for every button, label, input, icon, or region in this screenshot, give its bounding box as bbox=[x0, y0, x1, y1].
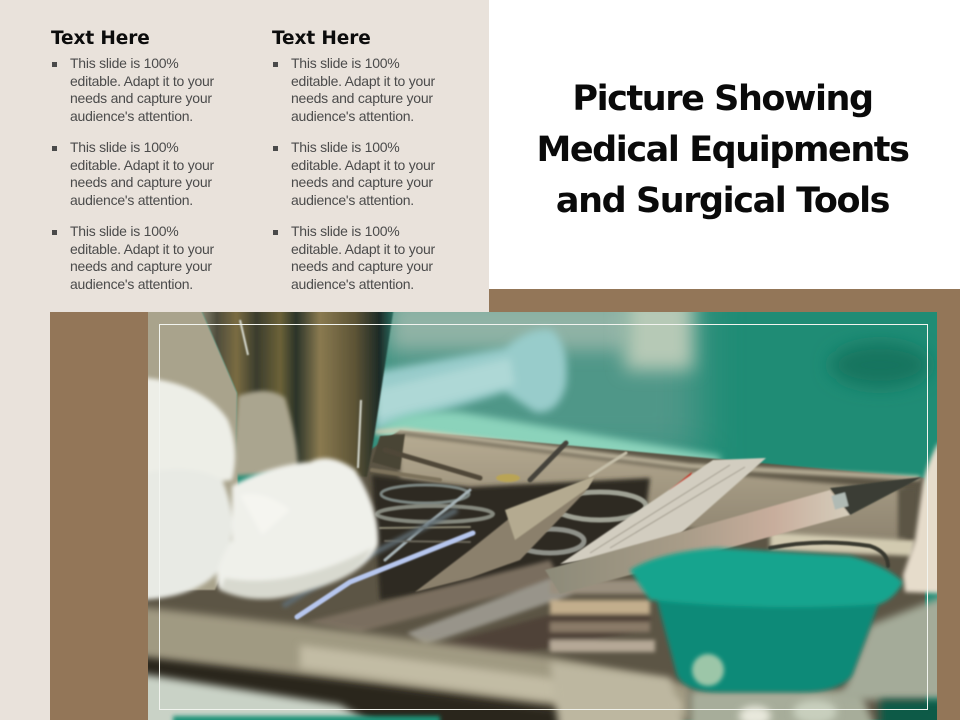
bullet: right 1: editable. Adapt it to your bbox=[291, 73, 435, 89]
green rubber bowl bbox=[630, 548, 903, 692]
photo background: blurred green drapes bbox=[100, 280, 960, 720]
bullet: right 2: This slide is 100% bbox=[291, 139, 400, 155]
bullet: left 3: needs and capture your bbox=[70, 258, 212, 274]
panel: beige text background bbox=[0, 0, 489, 720]
syringe (blurred) bbox=[375, 329, 567, 432]
bullet: right 3: editable. Adapt it to your bbox=[291, 241, 435, 257]
long steel handle and needle tip bbox=[545, 477, 922, 594]
metal cup bbox=[197, 300, 395, 477]
bullet: right 1: needs and capture your bbox=[291, 90, 433, 106]
bullet: right 3 bbox=[273, 223, 435, 292]
bullet: right 1: This slide is 100% bbox=[291, 55, 400, 71]
bullet: right 3: audience's attention. bbox=[291, 276, 414, 292]
text column: left bbox=[51, 28, 214, 292]
heading: right column: Text Here bbox=[272, 28, 371, 49]
bullet: left 3: This slide is 100% bbox=[70, 223, 179, 239]
scalpel blade bbox=[415, 476, 595, 592]
bullet: left 2: editable. Adapt it to your bbox=[70, 157, 214, 173]
panel: brown backing block bbox=[50, 289, 960, 720]
bullet: left 2 bbox=[52, 139, 214, 208]
gauze behind cotton bbox=[130, 300, 240, 590]
bullet: left 1: editable. Adapt it to your bbox=[70, 73, 214, 89]
bullet: left 3: editable. Adapt it to your bbox=[70, 241, 214, 257]
heading: left column: Text Here bbox=[51, 28, 150, 49]
lower blurred instruments bbox=[307, 560, 655, 662]
bullet: right 2: audience's attention. bbox=[291, 192, 414, 208]
cotton balls bbox=[130, 376, 378, 600]
bullet: right 3: needs and capture your bbox=[291, 258, 433, 274]
gloved hand at right bbox=[903, 430, 960, 594]
front tray rim bbox=[130, 590, 960, 720]
title: and Surgical Tools bbox=[556, 181, 889, 221]
tray: interior and rim bbox=[130, 430, 925, 720]
title bbox=[536, 79, 909, 221]
bullet: left 2: This slide is 100% bbox=[70, 139, 179, 155]
bullet: right 1: audience's attention. bbox=[291, 108, 414, 124]
title: Medical Equipments bbox=[536, 130, 909, 170]
forceps silver line bbox=[283, 510, 457, 606]
bullet: right 1 bbox=[273, 55, 435, 124]
title: Picture Showing bbox=[572, 79, 873, 119]
light bokeh on bowl bbox=[692, 654, 724, 686]
bullet: right 2 bbox=[273, 139, 435, 208]
forceps blue highlight bbox=[297, 533, 473, 617]
surgical instruments: scissor handles bbox=[372, 443, 888, 566]
bullet: left 1: needs and capture your bbox=[70, 90, 212, 106]
bullet: left 1 bbox=[52, 55, 214, 124]
bullet: left 1: audience's attention. bbox=[70, 108, 193, 124]
white inset frame on photo bbox=[159, 324, 928, 710]
bullet: left 2: needs and capture your bbox=[70, 174, 212, 190]
text column: right bbox=[272, 28, 435, 292]
mint drape under syringe bbox=[378, 411, 720, 466]
bullet: right 2: editable. Adapt it to your bbox=[291, 157, 435, 173]
bullet: left 1: This slide is 100% bbox=[70, 55, 179, 71]
bullet: right 2: needs and capture your bbox=[291, 174, 433, 190]
bullet: left 3: audience's attention. bbox=[70, 276, 193, 292]
bullet: left 2: audience's attention. bbox=[70, 192, 193, 208]
bullet: right 3: This slide is 100% bbox=[291, 223, 400, 239]
bullet: left 3 bbox=[52, 223, 214, 292]
photo: surgical tools on a tray bbox=[148, 312, 937, 720]
steel ruler bbox=[560, 458, 766, 564]
